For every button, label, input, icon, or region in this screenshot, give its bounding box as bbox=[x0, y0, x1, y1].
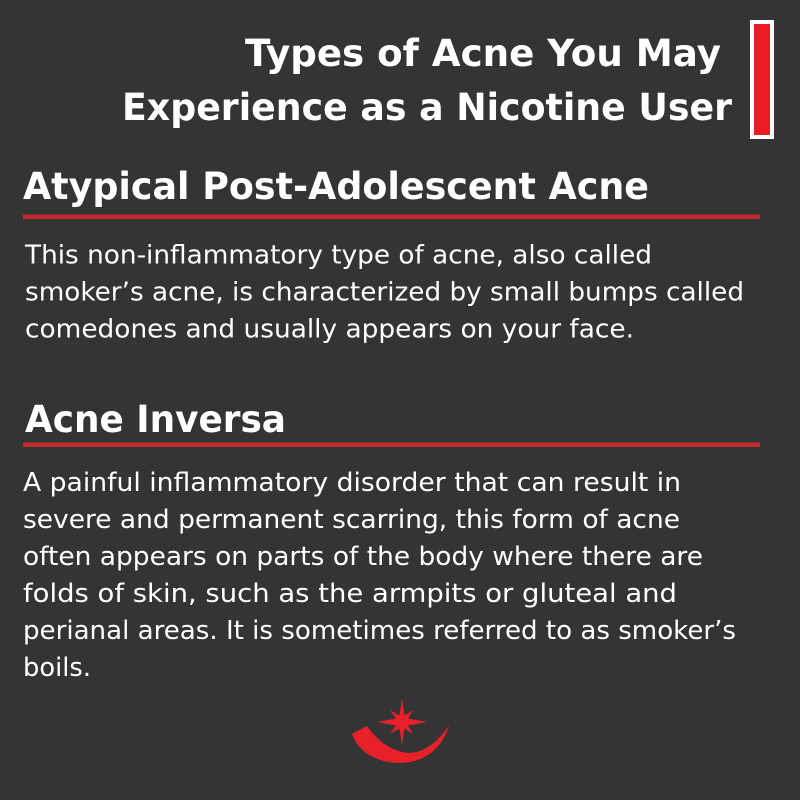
title bbox=[122, 32, 733, 129]
heading: atypical post-adolescent acne: Atypical Post-Adolescent Acne bbox=[23, 164, 649, 208]
text block: acne inversa description: boils. bbox=[23, 653, 91, 683]
text block: acne inversa description: perianal areas. It is sometimes referred to as smoker’s bbox=[23, 616, 736, 646]
text block: acne inversa description bbox=[23, 468, 736, 683]
text block: acne inversa description: folds of skin, such as the armpits or gluteal and bbox=[23, 579, 677, 609]
panel: atypical post-adolescent acne bbox=[23, 164, 760, 344]
text block: acne inversa description: severe and permanent scarring, this form of acne bbox=[23, 505, 680, 535]
accent bar bbox=[752, 22, 772, 137]
text block: atypical acne description: This non-inflammatory type of acne, also called bbox=[24, 240, 652, 270]
title: Types of Acne You May bbox=[245, 32, 721, 75]
heading: acne inversa: Acne Inversa bbox=[25, 397, 286, 441]
text block: atypical acne description bbox=[24, 240, 744, 344]
title: Experience as a Nicotine User bbox=[122, 86, 733, 129]
text block: acne inversa description: A painful inflammatory disorder that can result in bbox=[23, 468, 681, 498]
text block: atypical acne description: smoker’s acne, is characterized by small bumps called bbox=[25, 278, 744, 308]
panel: acne inversa bbox=[23, 397, 760, 683]
text block: atypical acne description: comedones and usually appears on your face. bbox=[25, 314, 634, 344]
text block: acne inversa description: often appears on parts of the body where there are bbox=[23, 542, 703, 572]
divider rule bbox=[23, 442, 760, 447]
divider rule bbox=[23, 214, 760, 219]
icon: logo crescent and star bbox=[352, 698, 449, 763]
